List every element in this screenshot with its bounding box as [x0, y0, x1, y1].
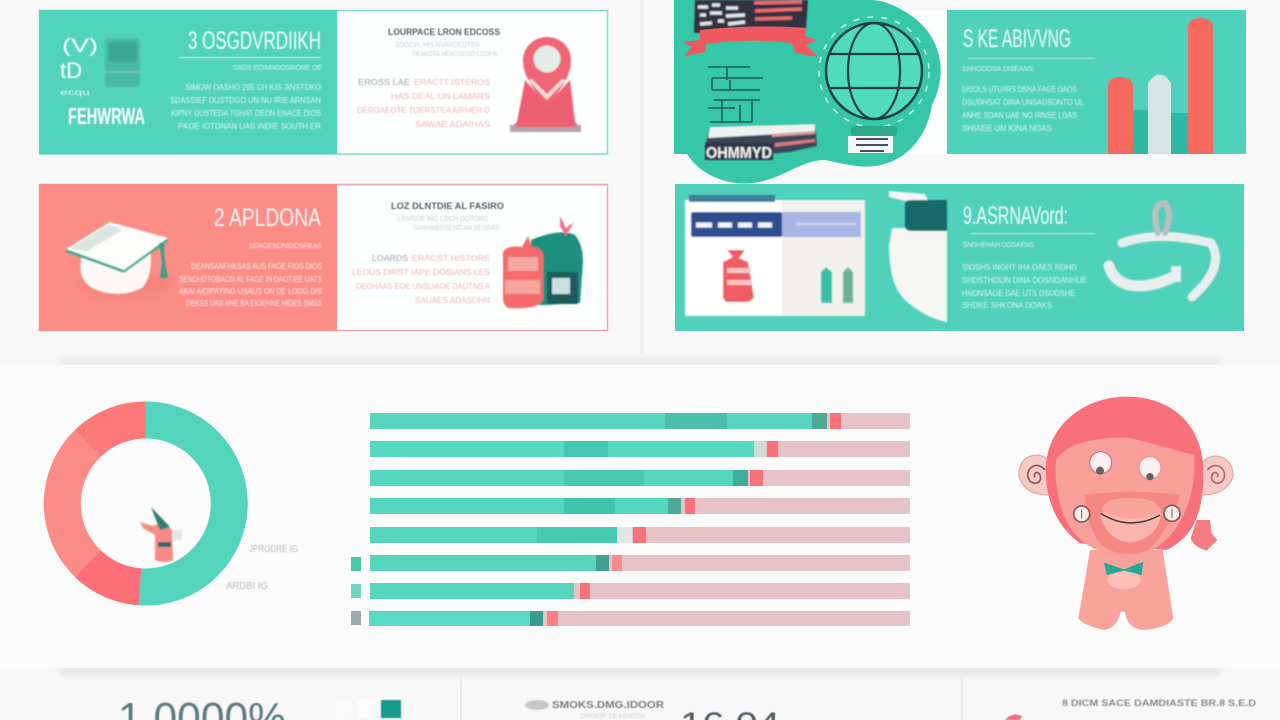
panel: coral card	[39, 184, 608, 331]
white side text: EROSS LAE	[358, 78, 410, 87]
footer stat three	[1005, 698, 1256, 720]
white side text: HAS DEAL UN LAMARS	[391, 92, 490, 101]
icon: flag building	[694, 0, 808, 33]
heading and body text: SHDSTHOUN DINA DOSNDANHUE	[962, 276, 1087, 285]
footer stat one	[118, 694, 401, 720]
heading and body text: SIOSHS INGHT IHA DAES NDHG	[962, 263, 1077, 272]
panel: top-left teal card	[39, 10, 608, 154]
white side text: DEOHAAS EOE UNSLIAOE DAOTNS A	[356, 282, 491, 291]
left label text: tD	[60, 58, 82, 83]
panel: bottom-right teal card	[675, 184, 1244, 331]
white side text: SAWAE ADAIHAS	[415, 120, 490, 129]
icon: globe bulb	[819, 17, 929, 153]
white side text: ERACTT ISTEROS	[414, 78, 490, 87]
icon: book stack: OHMMYD	[706, 145, 772, 162]
left label text: FEHWRWA	[68, 103, 145, 129]
white side text: LOZ DLNTDIE AL FASIRO	[391, 201, 504, 211]
middle band	[0, 359, 1280, 674]
heading and body text: ANHE SOAN UAE NO IRNSE LOAS	[962, 111, 1077, 120]
heading and body text: SENDHDTOBAON AL FAGE IN DAOTIEE UATS	[179, 275, 322, 284]
heading and body text: DISOLS UTUARS DSNA FAGE OAOS	[962, 85, 1077, 94]
white side text: LOURPACE LRON EDCOSS	[388, 27, 500, 37]
left label text: ecqu	[60, 88, 90, 97]
mouth	[1101, 513, 1160, 523]
icon: jar and bag	[503, 216, 583, 308]
heading and body text: SNDHEHAH DOSAENS	[963, 242, 1034, 249]
left label text: (V)	[62, 36, 98, 57]
icon: small figure	[140, 507, 182, 562]
donut chart	[62, 420, 298, 592]
footer stat two: DRESOR DE KENOSA	[580, 714, 645, 720]
white side text: LEMSDE IND LOCH DOTORS	[398, 216, 488, 223]
heading and body text: 3 OSGDVRDIIKH	[188, 27, 321, 55]
heading and body text: SDASSIEF DUSTDGO UN NU IRIE ARNSAN	[170, 96, 321, 105]
heading and body text: SHIAEE UN KINA NDAS	[962, 124, 1052, 133]
icon: hook	[1109, 203, 1216, 297]
legend squares	[351, 557, 361, 625]
illustration: browser window	[685, 195, 865, 316]
heading and body text: SADS EDIMNDOSRONE OE	[233, 65, 322, 72]
heading and body text	[170, 27, 322, 131]
white side text: DEROAEOTE TOERSTEA AIRHER D	[357, 106, 490, 115]
heading and body text: DSUDHSAT DINA UNSADSONTO UL	[962, 98, 1084, 107]
white side text: SPAHWEDSEND AN BEDRAS	[414, 225, 499, 232]
white side text: DEAKOTA HEROSEND LODER	[412, 51, 497, 58]
white side text: ERACST HISTORE	[412, 254, 490, 263]
bow tie	[1104, 562, 1143, 575]
eyes	[1090, 452, 1161, 480]
footer stat three: 8 DICM SACE DAMDIASTE BR.8 S.E.D	[1062, 698, 1256, 709]
heading and body text	[179, 204, 322, 308]
heading and body text: SHDKE SHKONA DOAKS	[962, 301, 1052, 310]
left label text	[60, 36, 145, 129]
heading and body text	[962, 202, 1095, 310]
heading and body text: SDAGENDNIDOSREAS	[249, 243, 322, 250]
white side text: LOARDS	[372, 254, 408, 263]
donut labels: JPRODRE IG	[249, 544, 298, 555]
footer divider lines	[460, 676, 963, 720]
heading and body text: S KE ABIVVNG	[963, 25, 1071, 53]
icon: ribbon	[683, 26, 818, 57]
heading and body text: SIMOW DASHO 205 CH KIS JINSTDKO	[185, 83, 321, 92]
bar chart: coral and pale columns	[1108, 18, 1213, 154]
heading and body text: 2 APLDONA	[214, 204, 321, 232]
ears	[1019, 455, 1233, 495]
hair	[1046, 397, 1203, 550]
heading and body text: 9.ASRNAVord:	[963, 202, 1068, 230]
heading and body text: KIPNY DUSTEDA TGHAT DEON ENACE DIOS	[171, 109, 321, 118]
illustration: bottle	[889, 191, 947, 322]
ponytail	[1191, 520, 1217, 551]
heading and body text: HNDNSAOE DAE UTS DSODSHE	[962, 289, 1075, 298]
stacked bar chart	[351, 413, 910, 626]
icon: location pin	[510, 37, 581, 132]
beard	[1085, 492, 1180, 554]
heading and body text: AKAI AIDIPAYING USAUS ON DE LOOG DIS	[179, 287, 322, 296]
white side text	[352, 201, 504, 305]
shape: green blob	[674, 0, 941, 183]
body	[1078, 550, 1173, 630]
illustration: monkey character	[1019, 397, 1233, 630]
chest glow	[1107, 571, 1141, 589]
cheek buttons	[1074, 505, 1180, 522]
heading and body text: PKOE IOTDNAN UAS INDIE SOUTH ER	[178, 122, 321, 131]
white side text: SDOCFL HIS NVARDEDTER	[395, 42, 480, 49]
heading and body text	[962, 25, 1095, 133]
white side text: SAUAES ADASOHN	[415, 296, 490, 305]
icon: graduation cap	[66, 222, 175, 295]
head	[1056, 437, 1194, 556]
heading and body text: SNHODOSA DISEANS	[962, 66, 1033, 73]
icon: glyph lines	[708, 67, 763, 123]
donut labels	[226, 544, 298, 592]
donut labels: ARDBI IG	[226, 581, 268, 592]
icon: book stack	[705, 124, 817, 162]
white side text	[357, 27, 500, 129]
heading and body text: DEKSS UAS ANE BA EIOEHNE HIDES SMSS	[186, 299, 322, 308]
footer stat two: SMOKS.DMG.IDOOR	[552, 700, 665, 711]
heading and body text: DEANSANFHKSAS AUS FAGE FIOS DIOS	[191, 262, 322, 271]
white side text: LEOUS DIRST IAPE DOSIANS LES	[352, 268, 490, 277]
icon: teal backpack	[105, 38, 140, 87]
panel: top-right card with blob	[674, 0, 1246, 183]
footer stat two	[525, 700, 780, 720]
